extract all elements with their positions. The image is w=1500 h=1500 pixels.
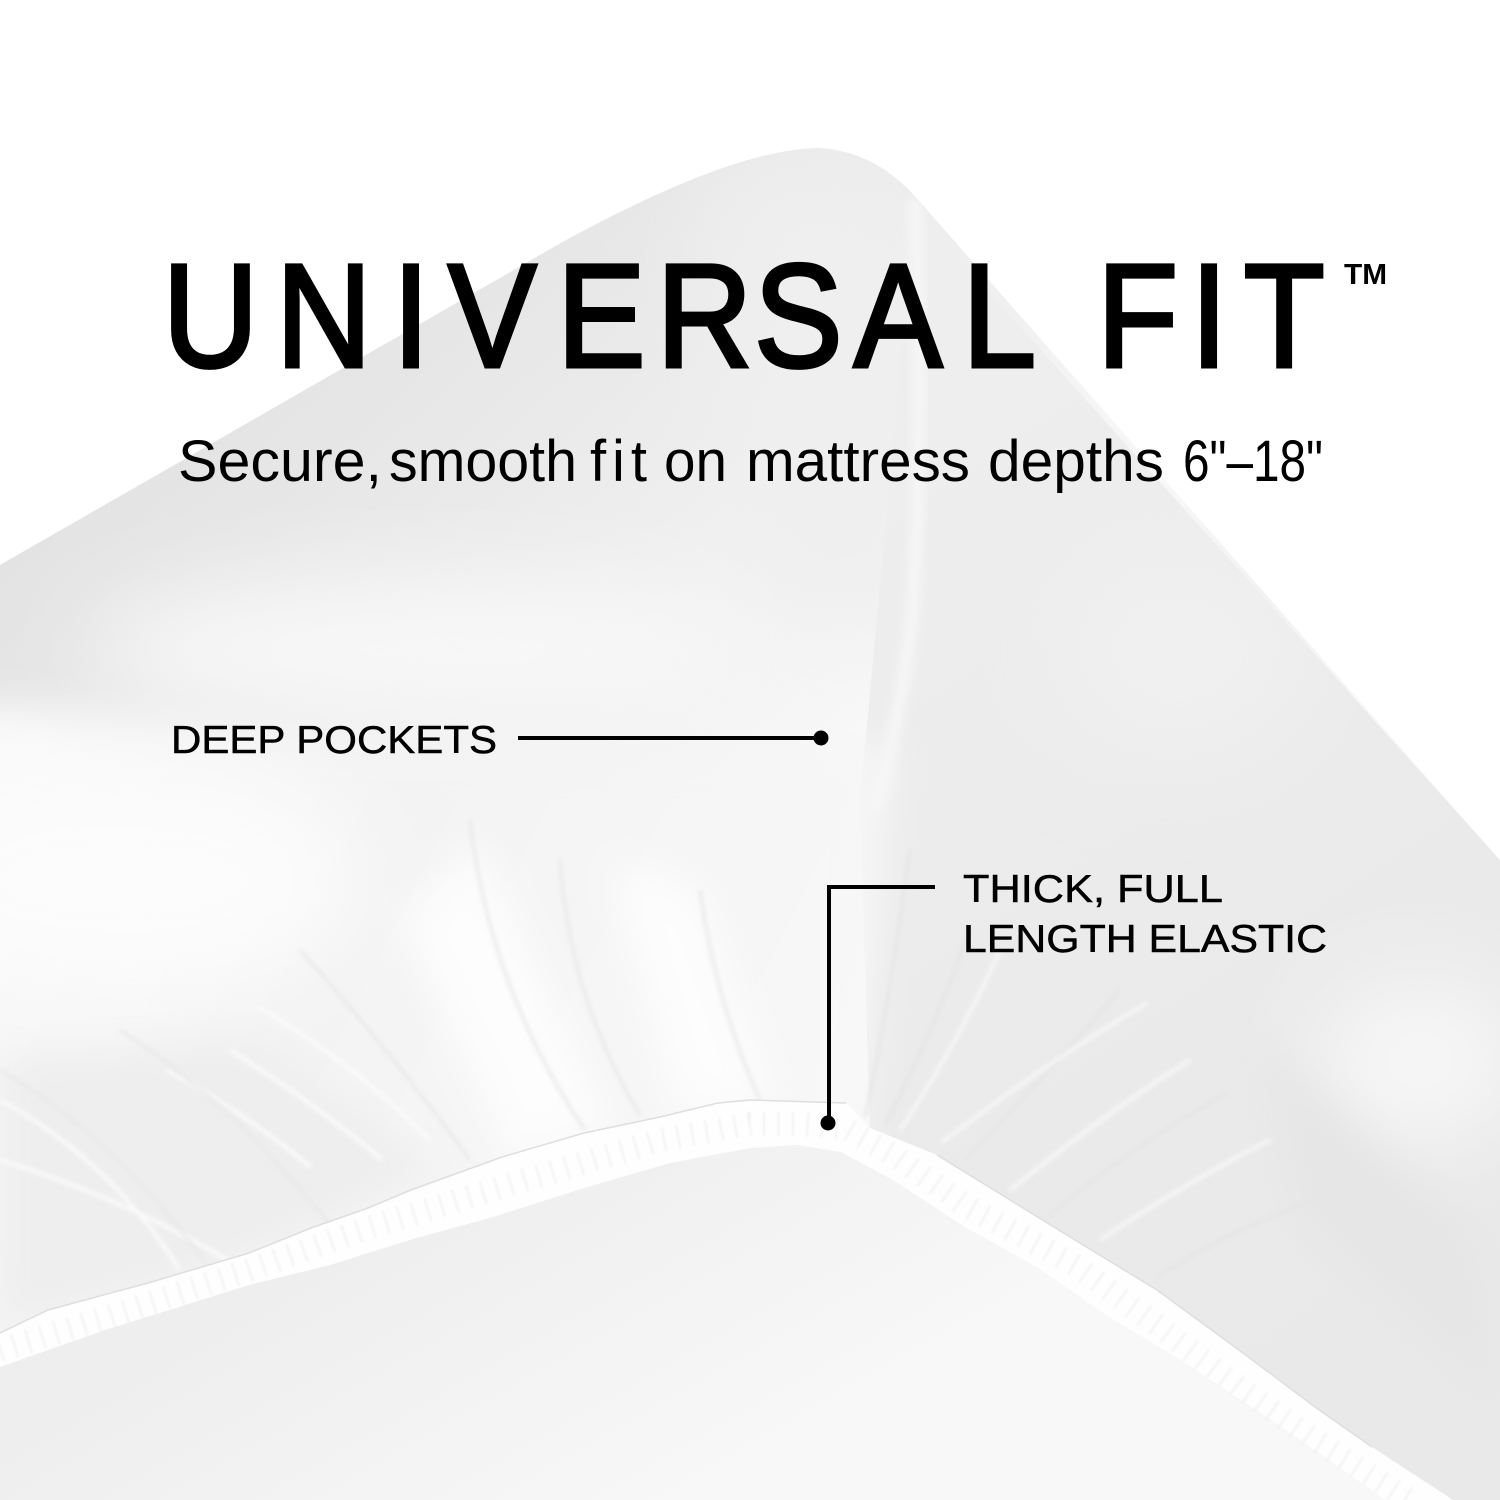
trademark symbol: TM bbox=[1344, 259, 1387, 291]
hem gathers bbox=[250, 1112, 1356, 1474]
vertical seam bbox=[895, 622, 914, 720]
subtitle: Secure, bbox=[178, 429, 382, 494]
top face of sheet bbox=[0, 148, 1136, 734]
callout: deep pockets bbox=[171, 719, 828, 762]
elastic hem bbox=[0, 1100, 1453, 1500]
subtitle: on bbox=[664, 429, 727, 494]
subtitle: fit bbox=[590, 429, 647, 494]
callout: deep pockets: DEEP POCKETS bbox=[171, 719, 497, 762]
subtitle: smooth bbox=[389, 429, 577, 494]
subtitle: mattress bbox=[746, 429, 970, 494]
hem stitching bbox=[0, 1100, 1372, 1447]
pleats, right bbox=[865, 1096, 869, 1114]
pleats, left bbox=[60, 1127, 298, 1232]
title: UNIVERSAL FIT bbox=[163, 233, 1325, 398]
callout: elastic: THICK, FULL bbox=[963, 868, 1223, 911]
left side face bbox=[0, 702, 870, 1056]
mattress underside bbox=[5, 1216, 1386, 1500]
subtitle: depths bbox=[988, 429, 1164, 494]
soft highlights bbox=[131, 588, 552, 702]
subtitle: 6"–18" bbox=[1183, 429, 1323, 494]
right side face bbox=[866, 416, 1500, 1500]
callout: elastic bbox=[820, 868, 1327, 1130]
corner highlight bbox=[700, 148, 1000, 640]
callout: elastic: LENGTH ELASTIC bbox=[963, 918, 1327, 961]
left face shade and light wedges bbox=[0, 1040, 440, 1330]
